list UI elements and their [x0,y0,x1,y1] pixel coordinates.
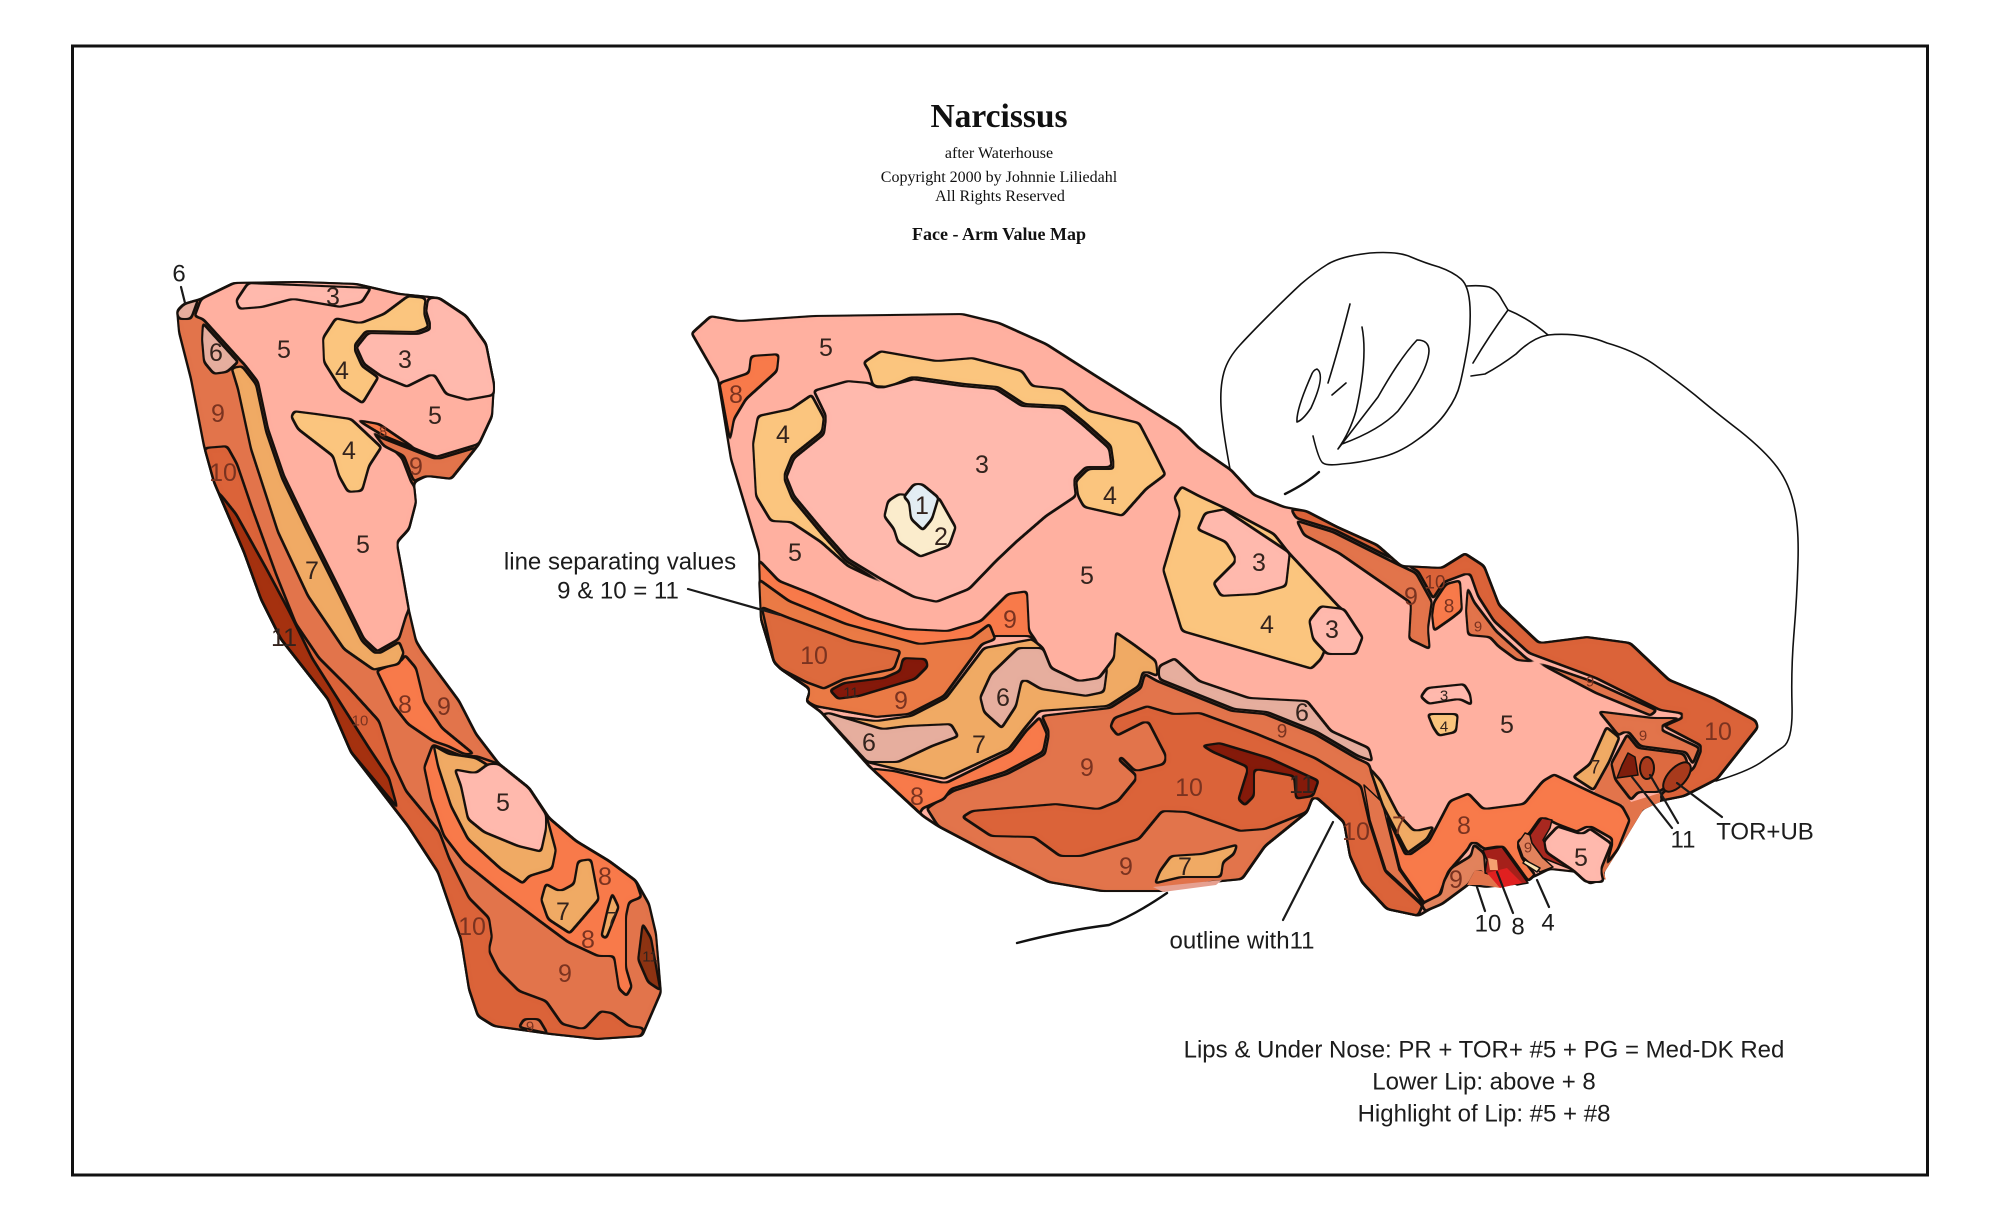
face number labels: 5 [788,539,802,567]
hand small value 7 [600,890,620,940]
arm number labels: 8 [379,424,387,440]
callout: outline with 11 [1170,822,1333,954]
face number labels: 7 [972,731,986,759]
title block: Copyright 2000 by Johnnie Liliedahl [881,169,1118,186]
arm number labels: 11 [642,948,658,966]
text block: lip mixing notes: Highlight of Lip: #5 + #8 [1358,1100,1610,1128]
arm value 11 shadow [213,483,400,813]
hand value 8 area [423,743,643,998]
arm number labels: 10 [458,913,486,941]
arm number labels: 9 [526,1018,534,1036]
face number labels: 11 [1289,771,1315,799]
arm small value 8 [352,418,427,455]
face number labels: 9 [894,687,908,715]
callout: nostril 11 [1632,775,1695,854]
face number labels: 9 [1474,618,1482,636]
lip value 10 [1467,870,1500,888]
title block: after Waterhouse [945,145,1053,162]
panel: arm value map [172,260,662,1040]
arm number labels: 6 [209,339,223,367]
arm number labels: 9 [558,960,572,988]
lip highlight value 4 [1523,860,1540,872]
small value 7 near nostril [1571,725,1621,792]
arm number labels: 11 [271,624,297,652]
arm number labels: 10 [209,459,237,487]
arm value 4 upper [322,295,430,405]
callout: lip values 10 8 4: 4 [1541,910,1555,936]
lower lip dark red [1483,847,1528,885]
face number labels: 5 [1500,711,1514,739]
arm number labels: 4 [335,357,349,385]
arm number labels [209,283,658,1036]
forehead value 4 left [752,393,913,597]
nose small value 4 [1426,713,1459,737]
value 2 highlight [883,493,957,558]
upper lip dark red [1530,818,1573,870]
face number labels: 9 [1586,674,1594,690]
face number labels: 5 [819,334,833,362]
face number labels: 4 [1440,718,1448,736]
face number labels: 11 [843,684,859,702]
pink strip below value 7 patch [1153,880,1222,892]
face number labels: 5 [1574,844,1588,872]
face number labels: 8 [910,783,924,811]
forehead value 4 band [862,350,1167,517]
callout: TOR+UB: TOR+UB [1716,818,1814,846]
face number labels: 8 [729,381,743,409]
lower wedge value 9 [1594,763,1660,880]
mouth value 8 area [1382,773,1631,905]
cheek value 4 [1162,485,1345,670]
callout: line separating values [504,548,780,615]
panel: face value map [690,313,1759,917]
neck value 7 band [820,630,1159,780]
face number labels [729,334,1732,894]
face number labels: 9 [1277,722,1287,742]
wrist line [1285,472,1319,494]
jaw value 11 [828,657,929,700]
arm small value 9 at base [517,1018,550,1035]
arm number labels: 8 [598,863,612,891]
nose small value 3 [1419,683,1473,707]
face number labels: 9 [1524,840,1532,856]
callout: line separating values: 9 & 10 = 11 [557,578,679,604]
face number labels: 4 [776,421,790,449]
arm main skin value 5 [193,281,495,653]
face number labels: 8 [1457,812,1471,840]
arm number labels: 4 [342,437,356,465]
face number labels: 3 [975,451,989,479]
arm number labels: 9 [409,453,423,481]
face number labels: 9 [1003,606,1017,634]
lip value 9 [1420,842,1487,913]
chin line [1017,893,1167,943]
face number labels: 8 [1444,596,1454,618]
face number labels: 2 [934,523,948,551]
title block: Face - Arm Value Map [912,224,1086,244]
arm value 9 under chin [368,428,480,483]
mouth value 5 patch [1543,825,1613,883]
shoulder and back contour [1467,286,1798,781]
jaw value 8 band [758,557,1047,718]
title block [881,98,1118,244]
under nose value 10 [1610,732,1689,802]
lower lip bright red [1487,868,1522,888]
panel: hand and hair line drawing [1017,252,1798,943]
arm value 6 patch [201,320,240,375]
neck value 6 lower [820,712,960,763]
face number labels: 1 [915,492,929,520]
text block: lip mixing notes: Lower Lip: above + 8 [1372,1068,1596,1096]
face number labels: 9 [1080,754,1094,782]
callout: TOR+UB [1677,783,1814,846]
face silhouette in value 5 [690,313,1759,917]
face number labels: 4 [1260,611,1274,639]
arm number labels: 5 [356,531,370,559]
profile dark value 10 [1289,508,1759,802]
cheek small value 3 [1308,605,1364,655]
face number labels: 7 [1178,853,1192,881]
face number labels: 3 [1325,616,1339,644]
neck value 10 main [960,705,1424,917]
hand value 7 ring [432,743,557,885]
arm silhouette [176,281,662,1040]
face number labels: 7 [1590,758,1600,778]
face number labels: 9 [1404,583,1418,611]
hand value 11 dark oval [637,920,662,993]
title block: Narcissus [930,98,1068,135]
face number labels: 5 [1080,562,1094,590]
face number labels: 10 [1342,818,1370,846]
face number labels: 6 [1295,699,1309,727]
arm fold lines [1471,310,1548,376]
arm number labels: 3 [398,346,412,374]
arm number labels: 5 [277,336,291,364]
jaw value 9 band [758,577,997,718]
arm number labels: 7 [556,898,570,926]
jaw value 10 [760,605,902,690]
arm number labels: 5 [496,789,510,817]
arm number labels: 9 [437,693,451,721]
arm number labels: 7 [607,910,617,930]
under nose dark marks [1617,753,1696,796]
hand contour [1221,252,1470,469]
face number labels: 10 [1175,774,1203,802]
callout: lip values 10 8 4: 8 [1511,914,1525,940]
face number labels: 6 [996,684,1010,712]
arm number labels: 3 [326,283,340,311]
face number labels: 4 [1103,482,1117,510]
arm value 3 top [235,282,373,310]
title block: All Rights Reserved [935,188,1065,205]
face number labels: 3 [1440,688,1448,704]
arm value 8 upper wrist [375,653,477,755]
arm value 4 lower [290,410,383,493]
profile value 9 band [1289,508,1433,651]
arm value 10 band [203,445,645,1040]
face number labels: 10 [1704,718,1732,746]
neck value 8 edge [868,715,1048,817]
face number labels: 9 [1449,866,1463,894]
arm number labels: 7 [305,557,319,585]
face number labels: 10 [800,642,828,670]
arm number labels: 5 [428,402,442,430]
lip peach highlight [1488,858,1498,870]
text block: lip mixing notes [1184,1036,1784,1128]
hand value 5 [453,763,547,853]
nostril value 9 [1596,710,1701,767]
value 1 highlight [902,483,940,532]
face number labels: 9 [1639,728,1647,744]
arm callout: 6 [172,260,186,303]
forehead value 8 [718,353,780,447]
neck value 7 patch [1153,843,1239,885]
arm number labels: 10 [352,712,368,730]
nose value 8 [1431,579,1463,633]
neck value 6 long band [1158,657,1374,763]
upper lip patch value 9 [1518,833,1553,872]
arm value 7 strip [230,365,405,671]
finger lines [1297,304,1429,449]
callout: nostril 11: 11 [1671,826,1695,854]
mouth value 7 small [1366,762,1436,855]
neck base value 9 [925,672,1424,917]
arm small value 6 at corner [176,298,200,320]
face number labels: 9 [1119,853,1133,881]
cheek value 3 [1196,508,1291,597]
neck value 6 upper [979,647,1109,730]
callout: line separating values: line separating values [504,548,736,576]
callout: lip values 10 8 4: 10 [1475,910,1501,938]
neck value 11 [1199,742,1320,807]
arm number labels: 9 [211,400,225,428]
arm number labels: 8 [398,691,412,719]
face number labels: 3 [1252,549,1266,577]
arm number labels: 8 [581,926,595,954]
callout: outline with 11: outline with11 [1170,928,1314,954]
face number labels: 6 [862,729,876,757]
arm callout: 6: 6 [172,260,186,288]
nose value 9 strip [1465,583,1659,717]
arm value 3 right [355,297,495,401]
callout: lip values 10 8 4 [1475,872,1555,940]
text block: lip mixing notes: Lips & Under Nose: PR + TOR+ #5 + PG = Med-DK Red [1184,1036,1784,1064]
face number labels: 7 [1392,812,1406,840]
neck value 9 thin strip [1364,785,1424,905]
forehead value 3 [785,378,1113,603]
hand value 7 patch [540,858,600,935]
face number labels: 10 [1424,572,1446,594]
